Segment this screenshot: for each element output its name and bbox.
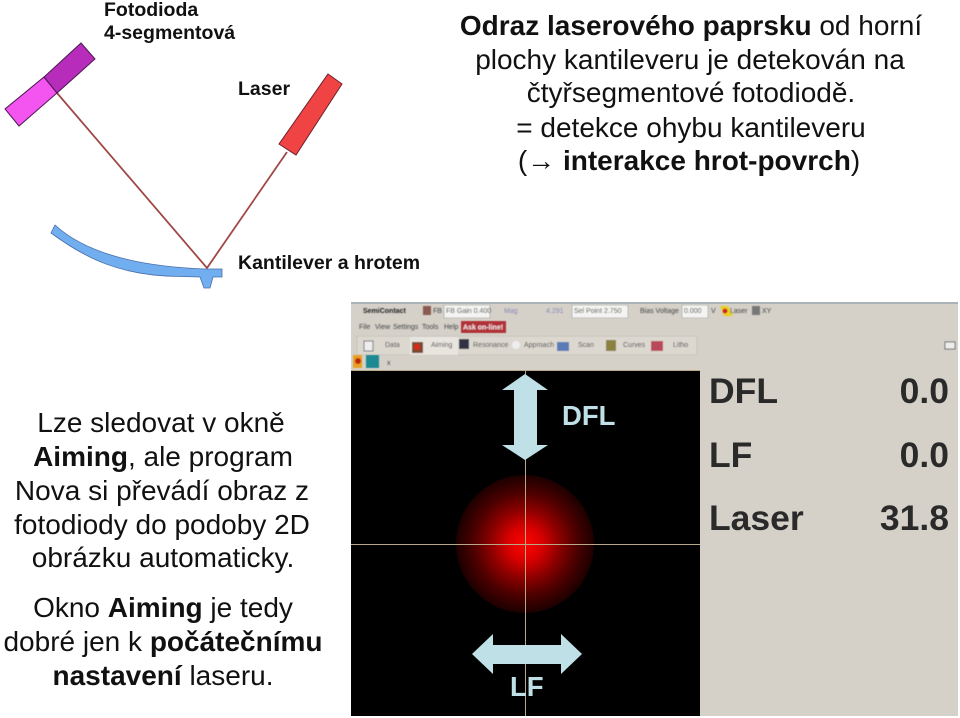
- toolbar: top controls: 4.291: [546, 308, 564, 315]
- panel: software screenshot: [351, 302, 958, 716]
- toolbar: top controls: FB: [433, 308, 442, 315]
- menu bar: Tools: [422, 324, 439, 331]
- laser spot: [456, 475, 594, 613]
- menu bar: [359, 321, 506, 333]
- toolbar: top controls: V: [711, 308, 716, 315]
- note line 7: dobré jen k počátečnímu: [3, 626, 323, 657]
- window background: [351, 302, 958, 716]
- toolbar: top controls: Mag: [504, 308, 518, 315]
- toolbar: top controls: Laser: [730, 308, 748, 315]
- arrow: DFL vertical: [502, 374, 548, 460]
- explanation line 2: plochy kantileveru je detekován na: [475, 44, 905, 75]
- menu bar: Help: [444, 324, 459, 331]
- note line 8: nastavení laseru.: [52, 660, 274, 691]
- label: DFL on view: DFL: [562, 400, 615, 431]
- readout: LF: LF: [709, 435, 752, 475]
- explanation line 4: = detekce ohybu kantileveru: [516, 112, 866, 143]
- aiming view: black field: [351, 370, 700, 716]
- explanation line 3: čtyřsegmentové fotodiodě.: [527, 77, 855, 108]
- note line 5: obrázku automaticky.: [32, 542, 294, 573]
- menu bar: File: [359, 324, 370, 331]
- menu bar: View: [375, 324, 391, 331]
- toolbar: top controls: SemiContact: [363, 308, 406, 315]
- note line 2: Aiming, ale program: [33, 441, 293, 472]
- toolbar: mode tabs: Approach: [524, 342, 554, 349]
- menu bar: Ask on-line!: [463, 324, 503, 332]
- readout values: [709, 371, 949, 538]
- toolbar: top controls: FB Gain 0.400: [446, 308, 491, 315]
- toolbar: mode tabs: [357, 336, 955, 355]
- readout: Laser value: 31.8: [880, 498, 949, 538]
- toolbar: mode tabs: Aiming: [431, 342, 453, 349]
- view toolbar icons: x: [387, 360, 391, 367]
- arrow: LF horizontal: [472, 634, 582, 674]
- toolbar: mode tabs: Resonance: [473, 342, 509, 349]
- note line 6: Okno Aiming je tedy: [33, 592, 293, 623]
- label: laser: Laser: [238, 78, 290, 100]
- toolbar: top controls: XY: [762, 308, 772, 315]
- toolbar: mode tabs: Litho: [673, 342, 688, 349]
- toolbar: mode tabs: Data: [385, 342, 400, 349]
- toolbar: top controls: [363, 305, 772, 318]
- reflected laser beam: [57, 93, 287, 268]
- readout: Laser: Laser: [709, 498, 804, 538]
- note line 1: Lze sledovat v okně: [37, 407, 285, 438]
- icon: laser: [279, 74, 342, 155]
- label: 4-segment: 4-segmentová: [104, 22, 235, 44]
- label: LF on view: LF: [510, 671, 544, 702]
- label: cantilever with tip: Kantilever a hrotem: [238, 252, 420, 274]
- text block: laser reflection explanation: [460, 10, 922, 176]
- icon: four-segment photodiode: [5, 43, 95, 126]
- readout: DFL value: 0.0: [900, 371, 949, 411]
- view toolbar icons: [353, 355, 391, 368]
- text block: Aiming window note: [3, 407, 323, 691]
- note line 3: Nova si převádí obraz z: [15, 475, 309, 506]
- menu bar: Settings: [393, 324, 419, 331]
- explanation line 1: Odraz laserového paprsku od horní: [460, 10, 922, 41]
- toolbar: mode tabs: Scan: [578, 342, 594, 349]
- crosshair: [351, 370, 700, 716]
- toolbar: top controls: Sel Point 2.750: [574, 308, 622, 315]
- note line 4: fotodiody do podoby 2D: [14, 509, 310, 540]
- readout: DFL: DFL: [709, 371, 778, 411]
- toolbar: top controls: Bias Voltage: [640, 308, 679, 315]
- panel: AFM laser schematic: [5, 0, 420, 288]
- icon: cantilever and tip: [51, 225, 222, 288]
- toolbar: mode tabs: Curves: [623, 342, 646, 349]
- readout: LF value: 0.0: [900, 435, 949, 475]
- toolbar: top controls: 0.000: [684, 308, 702, 315]
- explanation line 5: (→ interakce hrot-povrch): [518, 145, 860, 176]
